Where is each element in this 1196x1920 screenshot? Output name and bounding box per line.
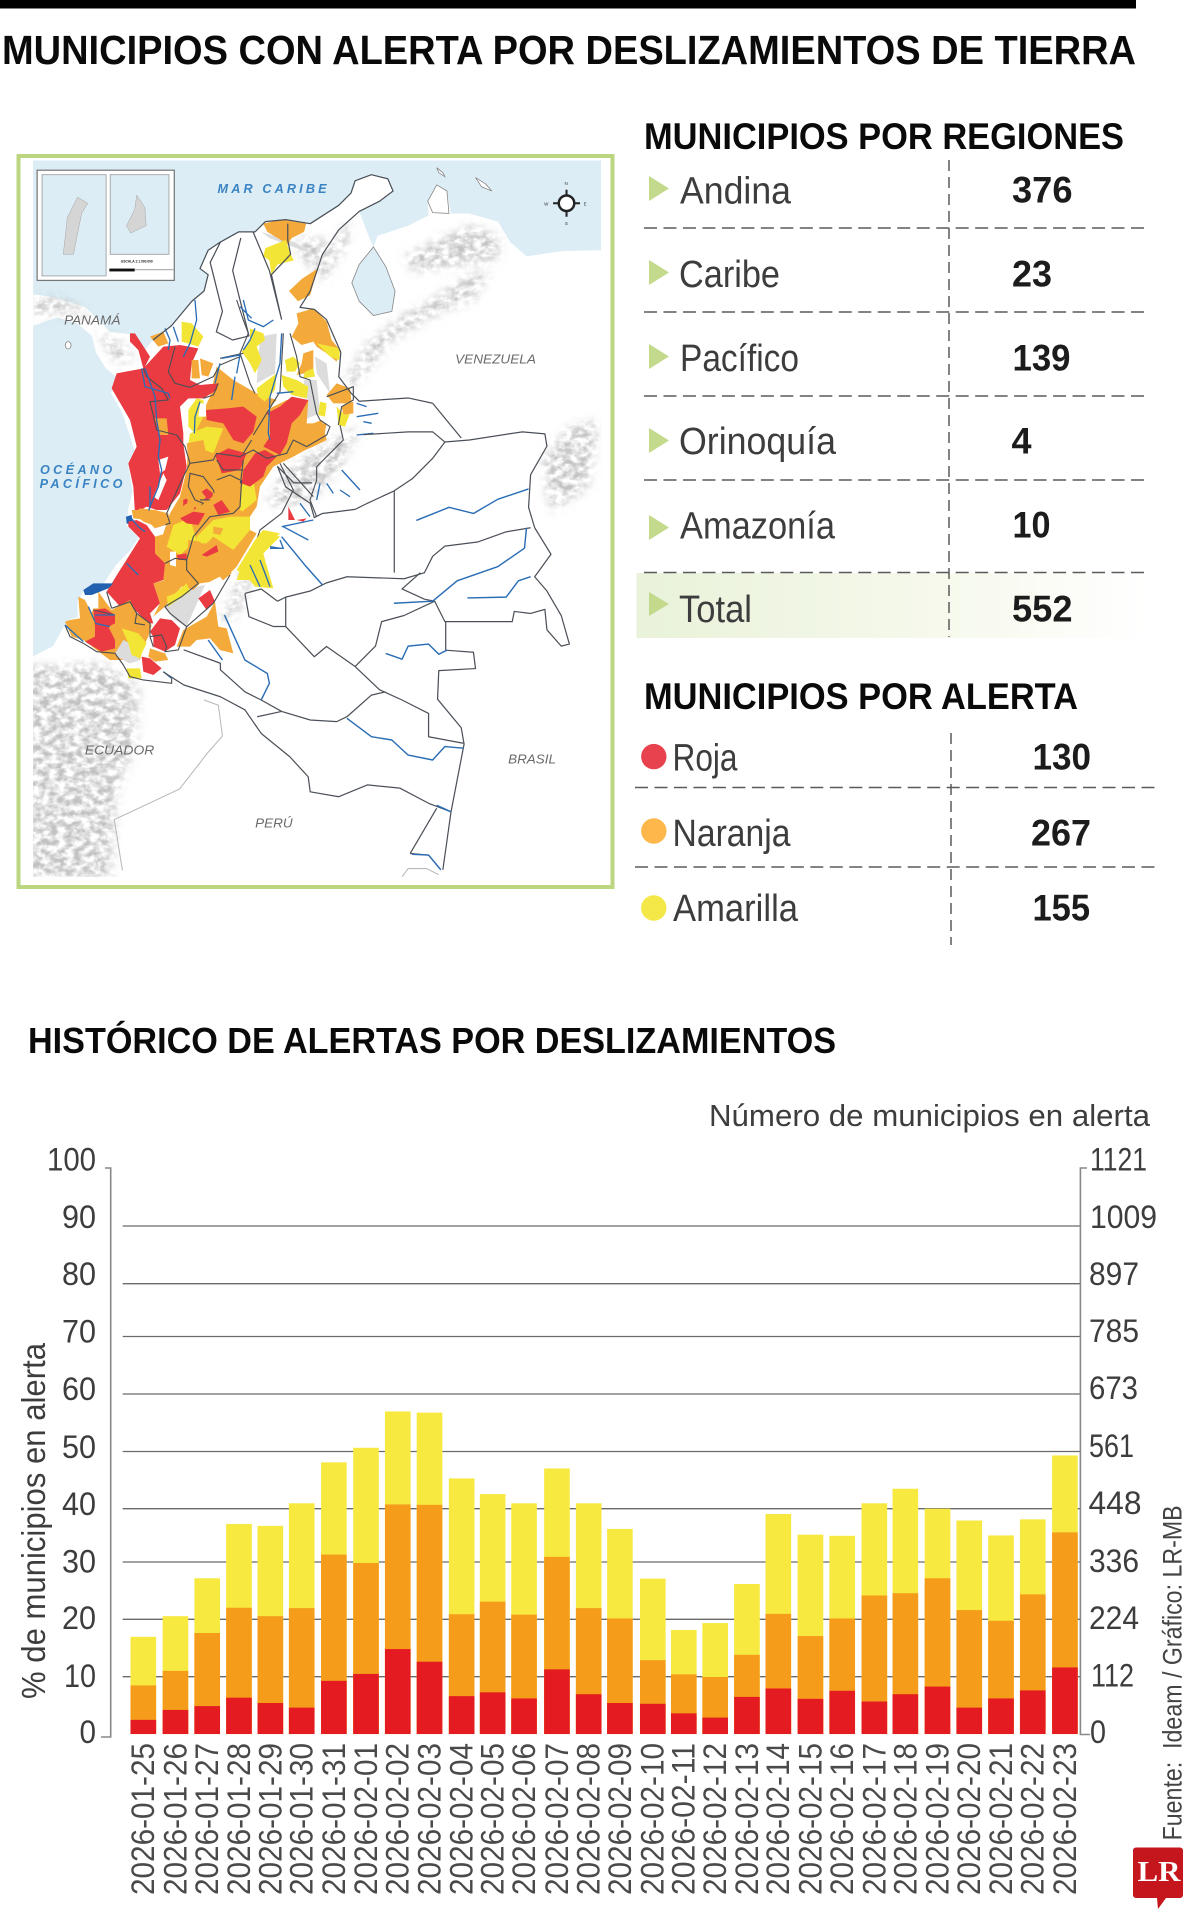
row: Pacífico (649, 338, 1070, 380)
bar 2026-02-18 (893, 1489, 918, 1734)
date labels: 2026-02-23 (1047, 1743, 1083, 1895)
bar 2026-02-06 (511, 1503, 537, 1734)
date labels: 2026-02-08 (571, 1743, 607, 1895)
map label: Mar Caribe: MAR CARIBE (218, 182, 327, 196)
bar 2026-02-05 (480, 1494, 505, 1734)
date labels: 2026-01-30 (284, 1743, 320, 1895)
left axis labels: 60 (62, 1371, 96, 1407)
bar 2026-02-15 (798, 1535, 823, 1734)
bar 2026-02-20 (956, 1521, 982, 1734)
right axis labels: 448 (1088, 1485, 1142, 1521)
panel: municipios por alerta (635, 676, 1155, 945)
compass (544, 181, 587, 226)
date labels: 2026-01-26 (157, 1743, 193, 1895)
inset scale bar: ESCALA 1:1.000.000 (121, 259, 153, 263)
row: Orinoquía: Orinoquía (679, 421, 837, 463)
south-west rivers (65, 487, 283, 678)
left axis labels: 40 (62, 1486, 96, 1522)
Venezuelan peninsula (428, 185, 449, 213)
date labels: 2026-02-21 (983, 1743, 1019, 1895)
bar 2026-02-12 (702, 1623, 728, 1734)
right axis labels (1088, 1142, 1157, 1750)
compass: E (584, 201, 587, 206)
rivers: east and south (208, 489, 531, 870)
date labels: 2026-02-03 (411, 1743, 447, 1895)
Caribbean islands (65, 168, 492, 349)
logo: LR (1133, 1848, 1183, 1909)
date labels: 2026-02-09 (602, 1743, 638, 1895)
right axis (1080, 1168, 1090, 1734)
Pacific bay mark (126, 515, 132, 524)
row: Roja: 130 (1032, 736, 1091, 778)
date labels: 2026-02-05 (475, 1743, 511, 1895)
row: Amarilla: Amarilla (673, 888, 799, 930)
left axis title: % de municipios en alerta (15, 1342, 52, 1699)
date labels: 2026-01-31 (316, 1743, 352, 1895)
bar 2026-02-19 (925, 1509, 950, 1734)
date labels: 2026-02-13 (729, 1743, 765, 1895)
right axis labels: 336 (1089, 1543, 1139, 1579)
map label: Ecuador: ECUADOR (85, 743, 154, 757)
bar 2026-01-29 (258, 1526, 283, 1734)
north department boundaries and rivers (210, 224, 291, 340)
row: Total (649, 588, 1072, 631)
department boundaries: east and south (153, 175, 433, 403)
date labels: 2026-01-28 (221, 1743, 257, 1895)
date labels: 2026-02-22 (1015, 1743, 1051, 1895)
right axis labels: 673 (1089, 1370, 1138, 1406)
right axis labels: 112 (1091, 1658, 1134, 1694)
date labels: 2026-01-29 (252, 1743, 288, 1895)
panel: bar chart (15, 1098, 1157, 1895)
logo: LR: LR (1138, 1856, 1182, 1888)
left axis labels: 0 (80, 1714, 96, 1750)
date labels: 2026-02-15 (792, 1743, 828, 1895)
bar 2026-02-22 (1020, 1519, 1046, 1734)
row: Total: Total (679, 589, 752, 631)
total highlight band (636, 573, 1148, 638)
date labels: 2026-02-18 (887, 1743, 923, 1895)
right axis labels: 897 (1089, 1256, 1139, 1292)
left axis labels: 80 (62, 1256, 96, 1292)
right axis title: Número de municipios en alerta (709, 1098, 1151, 1133)
heading: regiones: MUNICIPIOS POR REGIONES (644, 116, 1124, 157)
inset: Providencia (127, 195, 146, 233)
row: Caribe: 23 (1012, 253, 1052, 294)
bar 2026-01-28 (226, 1524, 252, 1734)
row: Naranja (641, 812, 1091, 855)
Ecuador and Peru boundary (114, 700, 439, 877)
date labels: 2026-02-16 (824, 1743, 860, 1895)
top black rule (0, 0, 1136, 8)
map frame (18, 156, 612, 887)
bar 2026-01-30 (289, 1503, 315, 1734)
bar 2026-02-13 (734, 1584, 760, 1734)
left axis (101, 1168, 111, 1737)
row: Orinoquía (649, 421, 1032, 463)
map artwork (20, 160, 601, 881)
Lake Maracaibo (352, 247, 395, 316)
row: Amarilla: 155 (1032, 888, 1090, 928)
bar 2026-02-07 (544, 1468, 570, 1734)
bar 2026-02-09 (607, 1529, 633, 1734)
bar 2026-02-04 (449, 1478, 474, 1734)
row: Andina (649, 170, 1072, 212)
row: Pacífico: Pacífico (680, 338, 799, 380)
gridlines (123, 1226, 1080, 1677)
map label: Panamá: PANAMÁ (64, 312, 120, 327)
left axis labels: 70 (62, 1314, 96, 1350)
bar 2026-01-25 (130, 1637, 156, 1734)
bar 2026-01-27 (194, 1578, 220, 1734)
date labels: 2026-02-19 (919, 1743, 955, 1895)
row: Amazonía: Amazonía (680, 505, 836, 547)
heading: histórico: HISTÓRICO DE ALERTAS POR DESLIZAMIENTOS (28, 1019, 836, 1061)
bar 2026-02-17 (862, 1503, 887, 1734)
inset: San Andrés (63, 197, 88, 254)
left axis labels: 50 (62, 1429, 96, 1465)
compass: W (544, 201, 549, 206)
bar 2026-02-08 (576, 1503, 602, 1734)
bar 2026-02-02 (385, 1411, 411, 1734)
row: Amazonía: 10 (1012, 505, 1050, 546)
map label: Océano: OCÉANO (40, 462, 112, 477)
bar 2026-02-14 (765, 1514, 791, 1734)
map label: Perú: PERÚ (255, 815, 294, 830)
date labels: 2026-02-17 (856, 1743, 892, 1895)
bar 2026-02-21 (988, 1535, 1014, 1734)
bar 2026-01-26 (163, 1616, 188, 1734)
bar 2026-02-03 (417, 1413, 442, 1734)
date labels: 2026-02-20 (951, 1743, 987, 1895)
date labels: 2026-02-04 (444, 1743, 480, 1895)
source credit: Fuente: Ideam / Gráfico: LR-MB (1158, 1505, 1188, 1840)
left axis labels: 100 (47, 1142, 96, 1178)
right axis labels: 1009 (1090, 1199, 1157, 1235)
alert regions: north (261, 220, 318, 301)
date labels: 2026-01-25 (125, 1743, 161, 1895)
left axis labels: 10 (64, 1658, 96, 1694)
bar 2026-01-31 (321, 1462, 347, 1734)
bar 2026-02-10 (640, 1579, 666, 1734)
date labels: 2026-02-07 (539, 1743, 575, 1895)
row: Roja (641, 736, 1091, 780)
row: Andina: Andina (680, 170, 792, 212)
right axis labels: 0 (1090, 1714, 1106, 1750)
bar 2026-02-23 (1052, 1455, 1078, 1734)
date labels: 2026-01-27 (189, 1743, 225, 1895)
map label: Pacífico: PACÍFICO (40, 476, 123, 491)
compass: N (564, 181, 568, 186)
row: Amarilla (641, 888, 1090, 930)
Andean rivers (141, 300, 378, 548)
right axis labels: 1121 (1090, 1142, 1147, 1178)
map label: Venezuela: VENEZUELA (455, 353, 536, 367)
date labels: 2026-02-14 (760, 1743, 796, 1895)
stacked bars (130, 1411, 1078, 1734)
land (33, 175, 601, 877)
heading: alerta: MUNICIPIOS POR ALERTA (644, 676, 1078, 717)
row: Andina: 376 (1012, 170, 1072, 211)
row: Naranja: 267 (1031, 812, 1091, 853)
south-west department boundaries (65, 480, 242, 683)
left axis labels: 20 (62, 1600, 96, 1636)
left axis labels: 90 (62, 1199, 96, 1235)
inset box (37, 170, 174, 280)
alert regions: Andean centre (112, 300, 378, 580)
row: Naranja: Naranja (672, 813, 791, 855)
date labels: 2026-02-12 (697, 1743, 733, 1895)
row: Orinoquía: 4 (1012, 421, 1032, 462)
right axis labels: 785 (1089, 1313, 1139, 1349)
right axis labels: 224 (1089, 1600, 1139, 1636)
panel: municipios por regiones (636, 116, 1148, 638)
title: MUNICIPIOS CON ALERTA POR DESLIZAMIENTOS DE TIERRA (2, 27, 1136, 73)
date labels (125, 1743, 1083, 1895)
row: Roja: Roja (672, 738, 738, 780)
row: Caribe: Caribe (679, 254, 780, 296)
row: Pacífico: 139 (1012, 338, 1070, 378)
row: Total: 552 (1012, 588, 1072, 629)
date labels: 2026-02-10 (635, 1743, 671, 1895)
row: Caribe (649, 253, 1052, 296)
bar 2026-02-01 (353, 1448, 379, 1734)
right axis labels: 561 (1089, 1428, 1134, 1464)
bar 2026-02-16 (829, 1536, 855, 1734)
terrain shading (20, 218, 598, 881)
Andean department boundaries (142, 300, 354, 538)
bar 2026-02-11 (671, 1630, 697, 1734)
left axis labels: 30 (62, 1544, 96, 1580)
date labels: 2026-02-06 (506, 1743, 542, 1895)
date labels: 2026-02-01 (348, 1743, 384, 1895)
row: Amazonía (649, 505, 1050, 547)
compass: S (565, 221, 568, 226)
alert regions: south-west (65, 480, 283, 683)
left axis labels (47, 1142, 96, 1750)
map label: Brasil: BRASIL (508, 752, 556, 766)
date labels: 2026-02-11 (666, 1743, 702, 1895)
date labels: 2026-02-02 (380, 1743, 416, 1895)
